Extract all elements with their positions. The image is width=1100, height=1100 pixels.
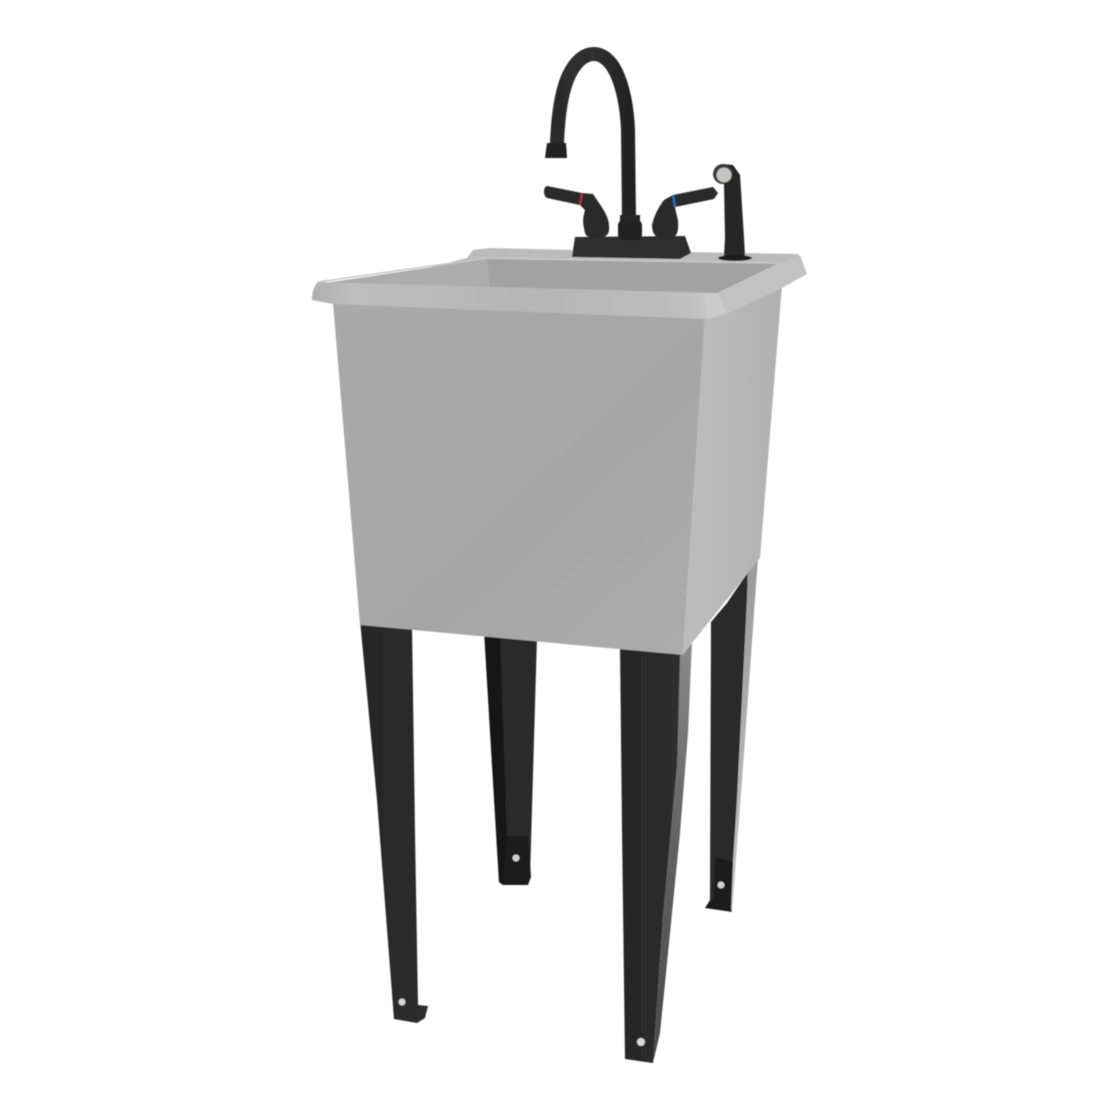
front right leg xyxy=(620,640,692,1063)
basin interior: left wall xyxy=(325,259,492,290)
basin interior: back wall xyxy=(487,259,777,294)
hot handle with red band xyxy=(544,186,609,238)
tub body xyxy=(333,285,782,655)
right rim band xyxy=(717,255,807,314)
spout tip xyxy=(545,143,567,158)
cold handle with blue band xyxy=(652,187,718,240)
back right leg xyxy=(705,558,758,912)
tub right side xyxy=(683,285,782,655)
spout xyxy=(557,54,629,222)
side sprayer xyxy=(713,164,752,261)
back middle leg xyxy=(484,630,537,885)
tub rim and basin xyxy=(312,248,807,319)
faucet xyxy=(544,54,718,259)
tub front face xyxy=(333,303,705,655)
deck plate xyxy=(572,236,691,259)
front left leg xyxy=(360,620,428,1023)
rear deck xyxy=(340,248,807,300)
front rim band xyxy=(312,282,727,319)
centre nut xyxy=(618,215,642,240)
